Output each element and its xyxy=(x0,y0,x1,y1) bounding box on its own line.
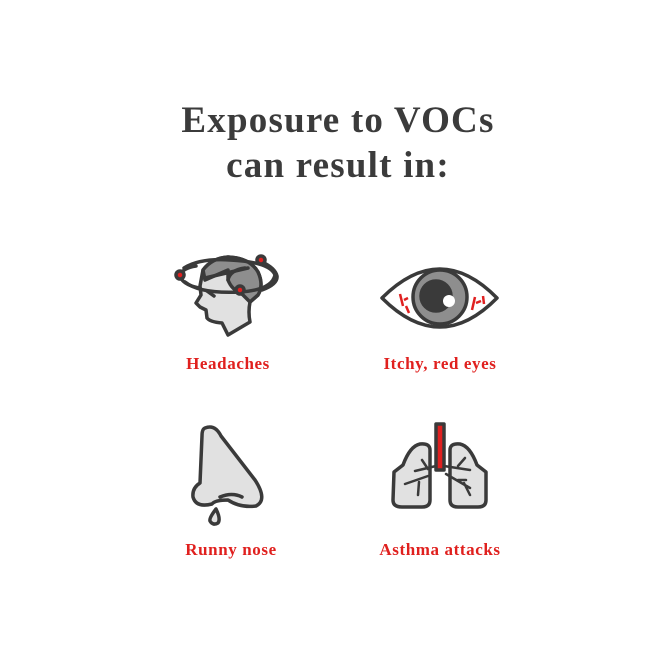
icon: eye xyxy=(382,269,497,327)
label: itchy red eyes: Itchy, red eyes xyxy=(383,354,497,373)
label: headaches: Headaches xyxy=(186,354,270,373)
title: can result in: xyxy=(226,145,450,186)
label: runny nose: Runny nose xyxy=(185,540,277,559)
icon: nose xyxy=(193,427,262,524)
icon: headache xyxy=(176,256,277,335)
icon: lungs xyxy=(393,424,486,507)
label: asthma attacks: Asthma attacks xyxy=(379,540,501,559)
title xyxy=(181,100,495,186)
title: Exposure to VOCs xyxy=(181,100,495,141)
